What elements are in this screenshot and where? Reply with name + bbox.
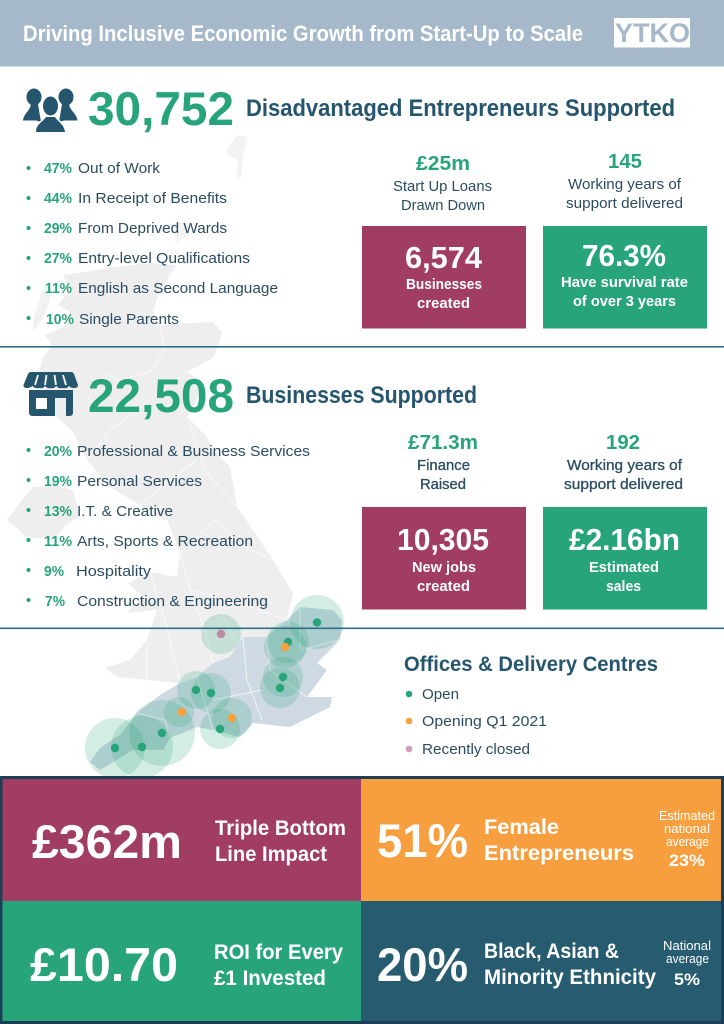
list: business sectors: 19%: [44, 473, 72, 490]
map: Orkney: [170, 222, 190, 242]
map: coverage circles: [85, 595, 344, 778]
card: new jobs: [362, 507, 526, 610]
card: businesses created: [362, 226, 526, 328]
card: survival rate: 76.3%: [582, 238, 666, 273]
panel: black asian minority ethnicity: average: [666, 951, 709, 966]
list: entrepreneur demographics: Single Parents: [79, 311, 179, 328]
panel: female entrepreneurs: Female: [484, 816, 559, 839]
heading: Businesses Supported: [246, 382, 477, 409]
stat: working years: Working years of: [567, 458, 683, 474]
card: survival rate: [543, 226, 707, 328]
panel: triple bottom line: Line Impact: [215, 843, 327, 866]
stat: start up loans: [393, 153, 492, 214]
card: new jobs: New jobs: [412, 559, 476, 576]
stat: working years: 192: [606, 432, 640, 454]
bottom impact panels: [0, 776, 724, 1024]
panel: black asian minority ethnicity: National: [663, 938, 711, 953]
legend: opening: Opening Q1 2021: [422, 713, 547, 730]
panel: black asian minority ethnicity: [361, 901, 721, 1021]
stat: finance raised: Raised: [420, 477, 466, 493]
stat: start up loans: £25m: [416, 153, 470, 175]
list: business sectors: 11%: [44, 533, 72, 550]
panel: black asian minority ethnicity: Black, Asian &: [484, 940, 619, 963]
card: new jobs: 10,305: [397, 522, 489, 557]
panel: return on investment: [2, 901, 361, 1021]
stat: working years: 145: [608, 151, 642, 173]
list: entrepreneur demographics: English as Second Language: [78, 280, 278, 297]
card: businesses created: 6,574: [405, 240, 483, 275]
list: entrepreneur demographics: In Receipt of Benefits: [78, 190, 227, 207]
map: Great Britain: [38, 263, 342, 770]
stat: working years: support delivered: [564, 477, 683, 493]
legend: closed: Recently closed: [422, 741, 530, 758]
panel: black asian minority ethnicity: Minority Ethnicity: [484, 966, 656, 989]
list: entrepreneur demographics: [26, 160, 278, 328]
panel: female entrepreneurs: 51%: [377, 814, 468, 867]
list: business sectors: 20%: [44, 443, 72, 460]
panel: female entrepreneurs: national: [664, 821, 710, 836]
legend: open: [406, 686, 459, 703]
stat: start up loans: Drawn Down: [401, 198, 485, 214]
list: entrepreneur demographics: 47%: [44, 160, 72, 177]
list: business sectors: 13%: [44, 503, 72, 520]
list: business sectors: Personal Services: [77, 473, 202, 490]
list: business sectors: Professional & Business Services: [77, 443, 310, 460]
icon: storefront: [23, 372, 78, 416]
map: Northern Ireland: [7, 485, 80, 540]
panel: black asian minority ethnicity: 5%: [674, 970, 700, 989]
list: entrepreneur demographics: From Deprived Wards: [78, 220, 227, 237]
list: entrepreneur demographics: Out of Work: [78, 160, 161, 177]
panel: return on investment: ROI for Every: [214, 941, 343, 964]
panel: female entrepreneurs: [361, 779, 721, 901]
panel: black asian minority ethnicity: 20%: [377, 938, 468, 991]
list: business sectors: Hospitality: [76, 563, 152, 580]
card: survival rate: of over 3 years: [573, 293, 676, 310]
panel: female entrepreneurs: Entrepreneurs: [484, 842, 634, 865]
map: location dots: [111, 618, 321, 752]
heading: Disadvantaged Entrepreneurs Supported: [246, 95, 675, 122]
legend: offices and delivery centres: [404, 653, 658, 758]
panel: triple bottom line: [2, 779, 361, 901]
list: business sectors: [26, 443, 310, 610]
stat: working years: Working years of: [568, 177, 682, 193]
card: businesses created: Businesses: [406, 276, 482, 293]
panel: return on investment: £10.70: [30, 938, 178, 991]
list: entrepreneur demographics: 10%: [46, 311, 74, 328]
panel: female entrepreneurs: Estimated: [659, 808, 715, 823]
panel: return on investment: £1 Invested: [214, 967, 326, 990]
section: businesses supported: [23, 369, 707, 610]
card: estimated sales: Estimated: [589, 559, 659, 576]
card: estimated sales: £2.16bn: [569, 522, 680, 557]
headline number: 22,508: [88, 369, 234, 422]
list: business sectors: I.T. & Creative: [77, 503, 173, 520]
map: South of England: [90, 607, 342, 770]
stat: finance raised: [408, 432, 478, 493]
card: estimated sales: [543, 507, 707, 610]
list: business sectors: 9%: [44, 563, 64, 580]
card: businesses created: created: [417, 295, 470, 312]
legend heading: Offices & Delivery Centres: [404, 653, 658, 676]
card: estimated sales: sales: [606, 578, 641, 595]
list: business sectors: Arts, Sports & Recreation: [77, 533, 253, 550]
title: Driving Inclusive Economic Growth from Start-Up to Scale: [23, 21, 583, 46]
panel: female entrepreneurs: average: [666, 834, 709, 849]
map: Outer Hebrides: [33, 285, 52, 332]
legend: open: Open: [422, 686, 459, 703]
list: entrepreneur demographics: 44%: [44, 190, 72, 207]
panel: triple bottom line: Triple Bottom: [215, 817, 346, 840]
map: Shetland: [227, 135, 248, 178]
list: entrepreneur demographics: 29%: [44, 220, 72, 237]
icon: people: [23, 88, 78, 132]
list: entrepreneur demographics: 27%: [44, 250, 72, 267]
list: entrepreneur demographics: Entry-level Qualifications: [78, 250, 250, 267]
map: UK background: [7, 135, 344, 778]
stat: working years: [564, 432, 683, 493]
list: entrepreneur demographics: 11%: [45, 280, 72, 297]
stat: finance raised: Finance: [417, 458, 470, 474]
card: new jobs: created: [417, 578, 470, 595]
logo: YTKO: [615, 18, 690, 48]
list: business sectors: Construction & Engineering: [77, 593, 268, 610]
section: disadvantaged entrepreneurs: [23, 82, 707, 328]
stat: finance raised: £71.3m: [408, 432, 478, 454]
header band: [0, 0, 724, 67]
stat: working years: [566, 151, 683, 212]
list: business sectors: 7%: [45, 593, 65, 610]
stat: working years: support delivered: [566, 196, 683, 212]
panel: triple bottom line: £362m: [32, 815, 182, 868]
headline number: 30,752: [88, 82, 234, 135]
stat: start up loans: Start Up Loans: [393, 179, 492, 195]
card: survival rate: Have survival rate: [561, 274, 688, 291]
panel: female entrepreneurs: 23%: [669, 851, 705, 870]
